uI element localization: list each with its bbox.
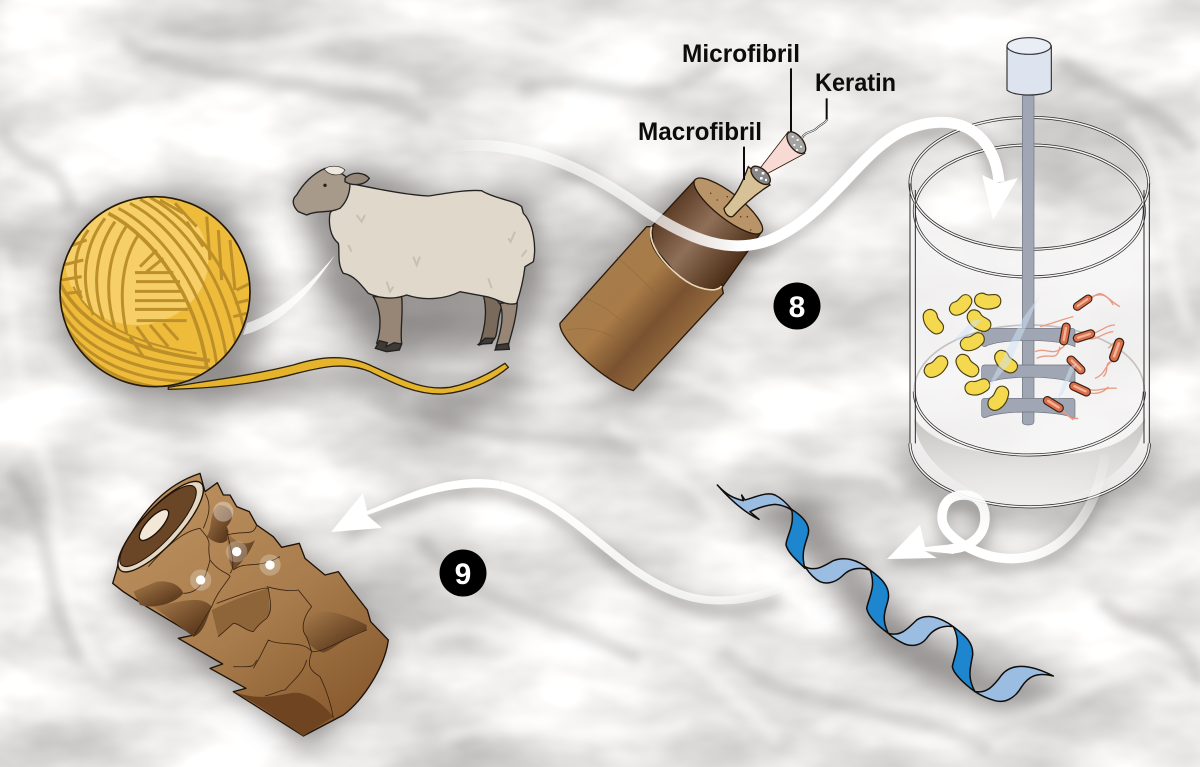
scale edges	[148, 493, 367, 718]
step number 9	[440, 550, 486, 596]
macrofibril end	[748, 163, 774, 188]
head	[293, 168, 350, 215]
light glints	[953, 295, 1077, 400]
arrow: sheep to yarn	[243, 255, 335, 335]
macrofibril	[724, 167, 770, 217]
cut end	[107, 471, 215, 583]
hair cortex cylinder	[560, 68, 827, 391]
arrow: fibres into vessel	[442, 122, 1018, 246]
arrow shadows	[345, 129, 1105, 610]
sheep	[293, 166, 535, 352]
label: Keratin: Keratin	[815, 69, 896, 97]
near legs	[373, 297, 402, 348]
microfibril cone	[760, 132, 805, 177]
leader lines	[744, 68, 827, 180]
arrow: vessel to keratin loop	[887, 455, 1105, 559]
ball of yarn and strand	[60, 195, 508, 394]
arrow: keratin to repaired fibre	[331, 479, 808, 600]
repaired hair fibre with scales	[107, 471, 388, 736]
cortex end cap	[687, 170, 769, 242]
vessel outlines	[910, 117, 1149, 507]
stirrer shaft and paddles	[982, 96, 1075, 425]
fibre silhouette	[113, 473, 388, 736]
label: Microfibril: Microfibril	[682, 40, 800, 68]
shaded scales	[133, 581, 183, 607]
bioreactor vessel	[910, 38, 1149, 507]
yellow cells	[918, 289, 1022, 413]
outer cuticle	[560, 227, 723, 391]
microfibril end	[783, 129, 809, 157]
keratin ribbon	[717, 485, 1053, 701]
keratin strand	[802, 119, 827, 138]
step number 9: 9	[455, 558, 471, 591]
inner cortex	[652, 180, 762, 295]
damage spots	[190, 502, 281, 591]
fleece	[329, 183, 535, 304]
yarn tail	[168, 358, 508, 394]
vessel floor	[914, 418, 1145, 503]
label: Macrofibril: Macrofibril	[638, 118, 762, 146]
vessel glass body	[910, 183, 1149, 507]
far legs	[479, 295, 502, 345]
soft shadows behind objects	[64, 175, 1150, 745]
stirrer motor cap	[1007, 38, 1051, 95]
yarn ball	[60, 195, 250, 388]
step number 8	[774, 282, 820, 330]
step number 8: 8	[789, 291, 805, 324]
bacteria	[1035, 294, 1125, 420]
